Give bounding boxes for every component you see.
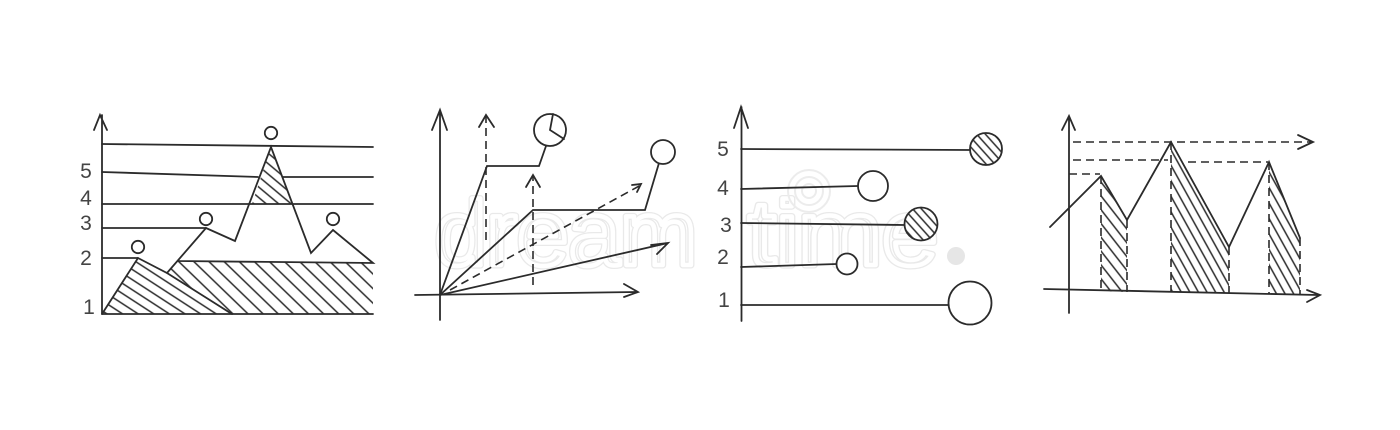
panel: area line chart xyxy=(80,115,373,319)
data line xyxy=(102,147,373,314)
axes with arrows xyxy=(415,110,638,320)
row 4 xyxy=(741,171,888,201)
y-axis labels: 3 xyxy=(720,214,732,237)
horizontal dashed guides xyxy=(1069,142,1312,174)
horizontal level lines xyxy=(102,144,373,258)
lower data line xyxy=(440,163,659,295)
sawtooth data line xyxy=(1050,142,1300,247)
dashed diagonal arrow xyxy=(450,185,641,290)
arrowhead 2 xyxy=(526,175,540,187)
diagonal arrowhead xyxy=(632,184,641,192)
row 1 xyxy=(741,282,992,324)
y-axis labels: 1 xyxy=(718,289,730,312)
y-axis labels: 3 xyxy=(80,212,92,235)
row 3 xyxy=(741,208,938,240)
y-axis labels: 5 xyxy=(717,138,729,161)
y-axis labels: 2 xyxy=(717,246,729,269)
y-axis labels: 4 xyxy=(717,177,729,200)
y axis with arrow xyxy=(734,107,748,321)
axes with arrows xyxy=(1044,116,1320,313)
watermark: dream xyxy=(435,183,697,285)
watermark: time xyxy=(748,183,938,285)
dashed upward arrow 1 xyxy=(485,116,487,240)
y-axis labels: 1 xyxy=(83,296,95,319)
y-axis labels xyxy=(717,138,732,312)
y-axis labels: 5 xyxy=(80,160,92,183)
hatched area 1 xyxy=(1101,176,1127,292)
y-axis labels: 4 xyxy=(80,187,92,210)
hatched area 2 xyxy=(1171,142,1229,293)
panel: vector growth chart xyxy=(415,110,675,320)
y-axis labels xyxy=(80,160,95,319)
panel: hatched sawtooth chart xyxy=(1044,116,1320,313)
pie marker xyxy=(534,114,566,146)
dashed upward arrow 2 xyxy=(532,176,534,285)
hatched area: wide band xyxy=(167,261,373,314)
y-axis labels: 2 xyxy=(80,247,92,270)
circle marker xyxy=(651,140,675,164)
peak markers xyxy=(132,127,339,253)
axes with arrow xyxy=(94,115,373,314)
panel: lollipop chart xyxy=(717,107,1002,324)
vertical dashed drop lines xyxy=(1101,142,1300,295)
row 5 xyxy=(741,133,1002,165)
top guide arrowhead xyxy=(1298,135,1313,149)
solid diagonal arrow xyxy=(440,243,668,295)
hatched area: central peak xyxy=(252,147,292,204)
upper data line xyxy=(440,146,546,295)
hatched area: left peak xyxy=(102,258,232,314)
watermark: dream xyxy=(435,183,697,285)
watermark: time xyxy=(748,183,938,285)
hatched area 3 xyxy=(1269,162,1300,295)
overlap edge between hatched areas xyxy=(167,273,232,314)
watermark xyxy=(435,170,965,285)
row 2 xyxy=(741,254,858,274)
arrowhead 1 xyxy=(479,115,494,127)
